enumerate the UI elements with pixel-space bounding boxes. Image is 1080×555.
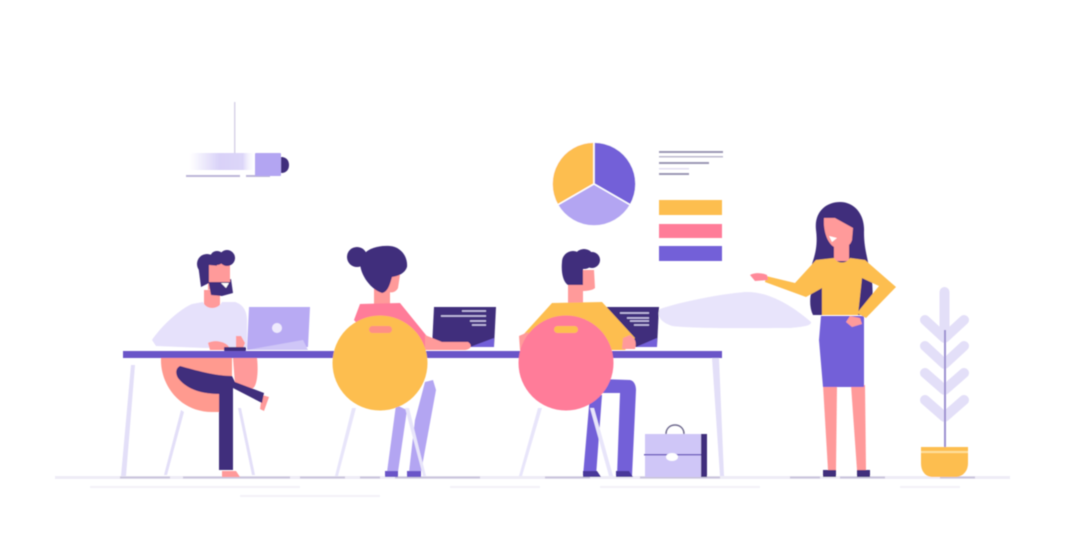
- chair legs: [164, 408, 255, 475]
- ball chair legs: [335, 408, 426, 476]
- chart text lines: [659, 151, 723, 175]
- legend bar: yellow: [659, 200, 722, 215]
- pot: [921, 447, 968, 477]
- face top: [209, 265, 230, 282]
- projection blob: [658, 292, 811, 328]
- beard: [208, 279, 233, 296]
- standing foot: [222, 471, 240, 477]
- face: [581, 270, 595, 291]
- laptop: [432, 307, 496, 347]
- shoes: [583, 471, 633, 477]
- shoes: [823, 470, 870, 477]
- briefcase: [644, 425, 707, 477]
- hand on hip: [846, 316, 862, 327]
- ball handle: [554, 326, 578, 333]
- trousers: [176, 366, 264, 470]
- shirt: [523, 302, 635, 350]
- chair seat: [161, 358, 232, 412]
- person: bearded man with laptop: [152, 250, 310, 477]
- hair bun: [347, 247, 367, 267]
- face: [208, 263, 230, 290]
- ball chair legs: [519, 408, 613, 476]
- smile: [221, 283, 229, 288]
- raised foot: [260, 395, 269, 411]
- arm over laptop: [425, 335, 471, 350]
- table: [121, 351, 724, 476]
- neck: [834, 243, 849, 261]
- floor line: [55, 476, 1010, 496]
- neck: [568, 283, 583, 305]
- projector: [186, 102, 289, 176]
- plant: [921, 292, 968, 477]
- neck: [374, 285, 390, 305]
- phone: [224, 347, 246, 351]
- leaves: [925, 292, 964, 417]
- legs: [823, 385, 837, 470]
- neck: [204, 290, 220, 308]
- smile: [829, 236, 837, 242]
- sweater: [765, 258, 896, 318]
- back hair: [810, 202, 873, 315]
- person: man on pink ball: [518, 249, 659, 477]
- knee: [233, 358, 258, 389]
- hair: [197, 250, 235, 287]
- pie chart: [552, 142, 636, 226]
- yellow ball: [332, 316, 428, 410]
- hand pointing: [750, 273, 768, 281]
- legend bar: pink: [659, 224, 722, 238]
- person: presenter woman: [750, 202, 896, 477]
- person: woman on yellow ball: [332, 246, 496, 477]
- skirt: [819, 316, 864, 387]
- legend bar: purple: [659, 246, 722, 261]
- front leg: [600, 379, 636, 476]
- pink ball: [518, 316, 614, 410]
- face: [824, 218, 853, 249]
- back leg: [583, 395, 602, 476]
- hand: [208, 341, 229, 350]
- legs: [387, 405, 407, 472]
- ball handle: [369, 326, 392, 333]
- face: [386, 272, 400, 292]
- shirt: [152, 302, 247, 348]
- hair: [360, 246, 407, 293]
- stem: [944, 330, 946, 447]
- hair: [562, 249, 600, 285]
- laptop: [247, 307, 310, 350]
- hands: [519, 332, 636, 350]
- laptop: [605, 307, 659, 347]
- shoes: [385, 471, 421, 477]
- shirt: [354, 303, 430, 350]
